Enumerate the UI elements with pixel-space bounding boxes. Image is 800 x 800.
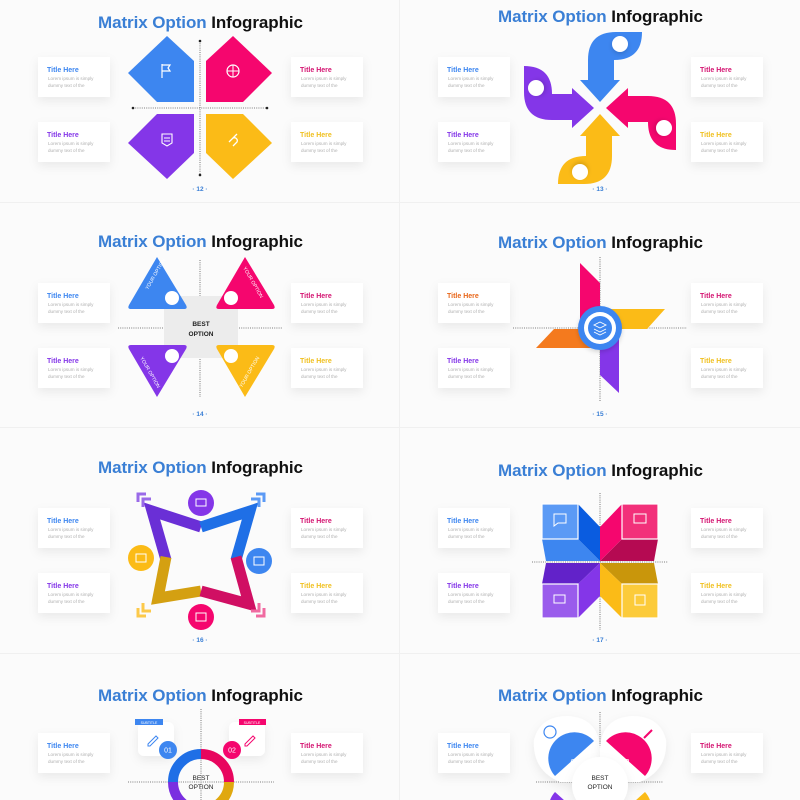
pentagon: blue flag xyxy=(128,36,194,102)
box 16 right top xyxy=(291,508,363,548)
title: Matrix Option Infographic xyxy=(498,461,703,480)
center box: best option: BEST xyxy=(192,321,210,328)
box 19 right: Lorem ipsum is simply xyxy=(701,752,747,757)
box 19 left: Title Here xyxy=(447,743,479,750)
box 14 left bottom: Title Here xyxy=(47,358,79,365)
center box: best option xyxy=(164,296,238,358)
card: subtitle 01: SUBTITLE xyxy=(141,721,158,725)
box 15 left top xyxy=(438,283,510,323)
box 13 right top: Title Here xyxy=(700,67,732,74)
box 13 left top xyxy=(438,57,510,97)
box 12 left bottom: Title Here xyxy=(47,132,79,139)
triangle: purple: YOUR OPTION xyxy=(138,356,161,390)
box 17 right bottom: Lorem ipsum is simply xyxy=(701,592,747,597)
box 14 right top xyxy=(291,283,363,323)
box 17 left top xyxy=(438,508,510,548)
box 14 right bottom: Title Here xyxy=(300,358,332,365)
box 16 left bottom: dummy text of the xyxy=(48,599,85,604)
box 15 right top: Title Here xyxy=(700,293,732,300)
page number 13: · 13 · xyxy=(592,186,608,193)
page number 16: · 16 · xyxy=(192,637,208,644)
title: Matrix Option Infographic xyxy=(498,686,703,705)
ring xyxy=(173,754,229,800)
box 16 right bottom xyxy=(291,573,363,613)
box 13 right bottom: Lorem ipsum is simply xyxy=(701,141,747,146)
center: best option xyxy=(572,757,628,800)
box 13 left top: Lorem ipsum is simply xyxy=(448,76,494,81)
page number 12: · 12 · xyxy=(192,186,208,193)
pentagon: purple badge xyxy=(128,114,194,179)
slide 14: triangles xyxy=(98,232,303,418)
box 17 left bottom: Lorem ipsum is simply xyxy=(448,592,494,597)
center: best option: BEST xyxy=(592,775,609,782)
triangle: pink xyxy=(216,257,275,309)
box 14 left top: Title Here xyxy=(47,293,79,300)
box 12 right bottom xyxy=(291,122,363,162)
petal: left xyxy=(534,716,600,782)
title: Matrix Option Infographic xyxy=(98,232,303,251)
box 18 left xyxy=(38,733,110,773)
box 18 left: dummy text of the xyxy=(48,759,85,764)
arrow: pink xyxy=(606,88,676,150)
box: blue xyxy=(542,504,600,561)
box 15 left bottom: Title Here xyxy=(447,358,479,365)
page number 14: · 14 · xyxy=(192,411,208,418)
box 18 right: Title Here xyxy=(300,743,332,750)
arrow: purple xyxy=(524,66,594,128)
triangle: yellow xyxy=(216,345,275,397)
box 13 left top: dummy text of the xyxy=(448,83,485,88)
box 16 left top: Lorem ipsum is simply xyxy=(48,527,94,532)
box 14 left bottom: Lorem ipsum is simply xyxy=(48,367,94,372)
box 14 right bottom: dummy text of the xyxy=(301,374,338,379)
box 14 left bottom: dummy text of the xyxy=(48,374,85,379)
box 12 right top: dummy text of the xyxy=(301,83,338,88)
box 13 right top: Lorem ipsum is simply xyxy=(701,76,747,81)
title: Matrix Option Infographic xyxy=(98,686,303,705)
box 15 left bottom: Lorem ipsum is simply xyxy=(448,367,494,372)
box 17 left top: dummy text of the xyxy=(448,534,485,539)
center icon: layers xyxy=(578,306,622,350)
box 16 left top: Title Here xyxy=(47,518,79,525)
box 13 left bottom: dummy text of the xyxy=(448,148,485,153)
circle: purple xyxy=(188,490,214,516)
title: Matrix Option Infographic xyxy=(498,7,703,26)
card: subtitle 02: SUBTITLE xyxy=(244,721,261,725)
box 16 left bottom: Title Here xyxy=(47,583,79,590)
box 12 right bottom: dummy text of the xyxy=(301,148,338,153)
box 13 left bottom: Title Here xyxy=(447,132,479,139)
box 16 left top xyxy=(38,508,110,548)
box 16 right top: dummy text of the xyxy=(301,534,338,539)
box 15 right top: dummy text of the xyxy=(701,309,738,314)
box 18 left: Title Here xyxy=(47,743,79,750)
box 18 right xyxy=(291,733,363,773)
box 14 left bottom xyxy=(38,348,110,388)
box 13 left bottom xyxy=(438,122,510,162)
box 15 right top: Lorem ipsum is simply xyxy=(701,302,747,307)
box 14 right top: Lorem ipsum is simply xyxy=(301,302,347,307)
box 13 right bottom: dummy text of the xyxy=(701,148,738,153)
petal: left: 01 xyxy=(571,758,580,767)
box 17 right top: dummy text of the xyxy=(701,534,738,539)
box 14 left top: Lorem ipsum is simply xyxy=(48,302,94,307)
card: subtitle 01: 01 xyxy=(164,748,172,754)
box 15 right top xyxy=(691,283,763,323)
arrow: yellow xyxy=(558,114,620,184)
triangle: blue xyxy=(128,257,187,309)
pentagon: pink globe xyxy=(206,36,272,102)
box 17 right top xyxy=(691,508,763,548)
triangle: purple xyxy=(128,345,187,397)
box 15 right bottom: dummy text of the xyxy=(701,374,738,379)
box 12 left bottom: Lorem ipsum is simply xyxy=(48,141,94,146)
arrow: blue xyxy=(580,32,642,102)
box 14 left top: dummy text of the xyxy=(48,309,85,314)
card: subtitle 02 xyxy=(223,719,266,759)
box 15 left top: Title Here xyxy=(447,293,479,300)
box 13 right bottom: Title Here xyxy=(700,132,732,139)
box 15 left top: Lorem ipsum is simply xyxy=(448,302,494,307)
box 12 right bottom: Title Here xyxy=(300,132,332,139)
box 17 right top: Lorem ipsum is simply xyxy=(701,527,747,532)
box 14 right bottom xyxy=(291,348,363,388)
box 17 right bottom xyxy=(691,573,763,613)
box 16 left bottom xyxy=(38,573,110,613)
box 12 left top: dummy text of the xyxy=(48,83,85,88)
triangle: blue: YOUR OPTION xyxy=(145,257,167,291)
label: best option xyxy=(189,775,214,791)
bottom petals xyxy=(548,792,652,800)
box 14 right top: dummy text of the xyxy=(301,309,338,314)
box 19 right: Title Here xyxy=(700,743,732,750)
box 12 right top xyxy=(291,57,363,97)
box 17 right bottom: Title Here xyxy=(700,583,732,590)
box 15 right bottom: Title Here xyxy=(700,358,732,365)
box 15 left top: dummy text of the xyxy=(448,309,485,314)
triangle: pink: YOUR OPTION xyxy=(241,266,264,300)
box: purple xyxy=(542,563,600,618)
title: Matrix Option Infographic xyxy=(98,13,303,32)
box 12 left top: Title Here xyxy=(47,67,79,74)
box 19 left: Lorem ipsum is simply xyxy=(448,752,494,757)
box 18 right: dummy text of the xyxy=(301,759,338,764)
box 12 left bottom xyxy=(38,122,110,162)
box 12 right bottom: Lorem ipsum is simply xyxy=(301,141,347,146)
label: best option: OPTION xyxy=(189,784,214,791)
box 12 right top: Title Here xyxy=(300,67,332,74)
box 19 left: dummy text of the xyxy=(448,759,485,764)
circle: pink xyxy=(188,604,214,630)
box 18 left: Lorem ipsum is simply xyxy=(48,752,94,757)
box 13 left bottom: Lorem ipsum is simply xyxy=(448,141,494,146)
box 16 left bottom: Lorem ipsum is simply xyxy=(48,592,94,597)
box 19 right: dummy text of the xyxy=(701,759,738,764)
box 14 right bottom: Lorem ipsum is simply xyxy=(301,367,347,372)
petal: right xyxy=(600,716,666,782)
box 15 left bottom: dummy text of the xyxy=(448,374,485,379)
chevrons xyxy=(138,494,264,616)
slide 13: arrow pinwheel xyxy=(498,7,703,193)
box 12 left top: Lorem ipsum is simply xyxy=(48,76,94,81)
box 17 right bottom: dummy text of the xyxy=(701,599,738,604)
box 17 right top: Title Here xyxy=(700,518,732,525)
box 17 left bottom: Title Here xyxy=(447,583,479,590)
page number 17: · 17 · xyxy=(592,637,608,644)
box 13 right top xyxy=(691,57,763,97)
box 16 right bottom: dummy text of the xyxy=(301,599,338,604)
box 19 right xyxy=(691,733,763,773)
circle: yellow xyxy=(128,545,154,571)
box 14 left top xyxy=(38,283,110,323)
title: Matrix Option Infographic xyxy=(98,458,303,477)
triangle: yellow: YOUR OPTION xyxy=(239,355,261,389)
box 17 left top: Title Here xyxy=(447,518,479,525)
box 12 left top xyxy=(38,57,110,97)
title: Matrix Option Infographic xyxy=(498,233,703,252)
circle: blue xyxy=(246,548,272,574)
box 15 right bottom: Lorem ipsum is simply xyxy=(701,367,747,372)
card: subtitle 02: 02 xyxy=(228,748,236,754)
slide 18: cycle ring xyxy=(98,686,303,800)
page number 15: · 15 · xyxy=(592,411,608,418)
box 16 right bottom: Title Here xyxy=(300,583,332,590)
pentagon: yellow link xyxy=(206,114,272,179)
box 13 right bottom xyxy=(691,122,763,162)
box 14 right top: Title Here xyxy=(300,293,332,300)
blades xyxy=(536,263,665,393)
slide 16: frame xyxy=(98,458,303,644)
box 12 right top: Lorem ipsum is simply xyxy=(301,76,347,81)
box 16 left top: dummy text of the xyxy=(48,534,85,539)
frame pieces xyxy=(152,511,250,604)
box 18 right: Lorem ipsum is simply xyxy=(301,752,347,757)
slide 19: petals xyxy=(498,686,703,800)
box 13 left top: Title Here xyxy=(447,67,479,74)
petal: right: 02 xyxy=(621,758,630,767)
box 15 right bottom xyxy=(691,348,763,388)
slide 12: pentagon matrix xyxy=(98,13,303,193)
box 16 right bottom: Lorem ipsum is simply xyxy=(301,592,347,597)
slide 15: pinwheel xyxy=(498,233,703,418)
box 17 left bottom: dummy text of the xyxy=(448,599,485,604)
box 17 left top: Lorem ipsum is simply xyxy=(448,527,494,532)
center box: best option: OPTION xyxy=(189,331,214,338)
box: yellow xyxy=(600,563,658,618)
center: best option: OPTION xyxy=(588,784,613,791)
card: subtitle 01 xyxy=(135,719,177,759)
box 12 left bottom: dummy text of the xyxy=(48,148,85,153)
box 15 left bottom xyxy=(438,348,510,388)
box 17 left bottom xyxy=(438,573,510,613)
box: pink xyxy=(600,504,658,561)
box 16 right top: Lorem ipsum is simply xyxy=(301,527,347,532)
label: best option: BEST xyxy=(193,775,210,782)
slide 17: 3D boxes xyxy=(498,461,703,644)
box 19 left xyxy=(438,733,510,773)
box 16 right top: Title Here xyxy=(300,518,332,525)
box 13 right top: dummy text of the xyxy=(701,83,738,88)
